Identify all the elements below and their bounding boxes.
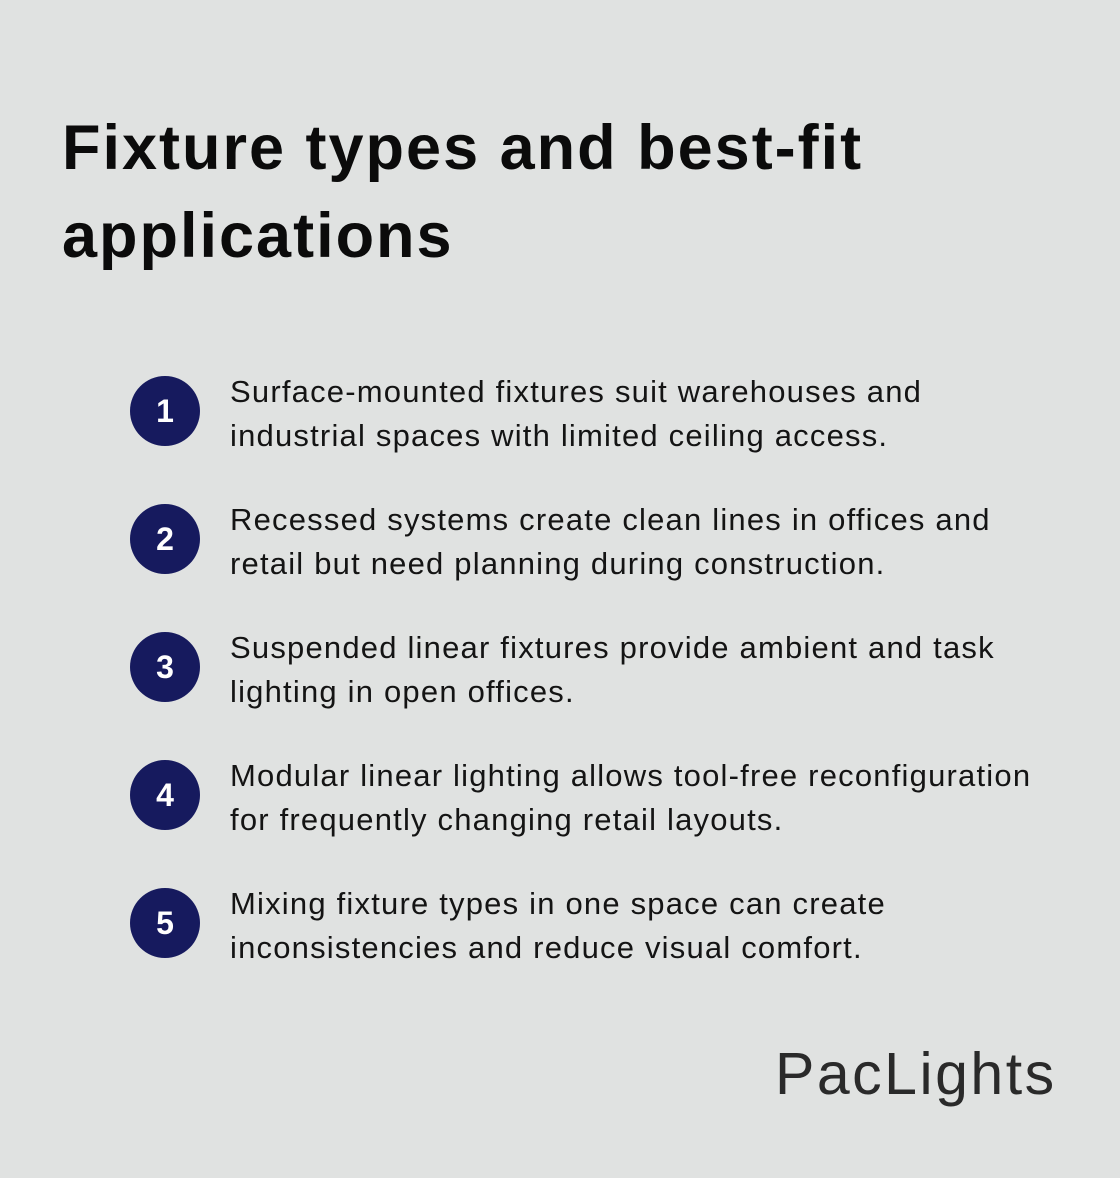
item 3	[130, 630, 995, 709]
item 1: Surface-mounted fixtures suit warehouses and	[230, 374, 922, 409]
item 2: 2	[156, 521, 174, 557]
item 2: retail but need planning during construction.	[230, 546, 885, 581]
item 5: inconsistencies and reduce visual comfort.	[230, 930, 863, 965]
item 2	[130, 502, 991, 581]
item 4: 4	[156, 777, 174, 813]
item 1: industrial spaces with limited ceiling access.	[230, 418, 888, 453]
item 5: Mixing fixture types in one space can create	[230, 886, 886, 921]
title: Fixture types and best-fit	[62, 113, 863, 183]
item 3: 3	[156, 649, 174, 685]
item 2: Recessed systems create clean lines in offices and	[230, 502, 991, 537]
title: applications	[62, 201, 454, 271]
item 5	[130, 886, 886, 965]
item 4: for frequently changing retail layouts.	[230, 802, 783, 837]
item 3: Suspended linear fixtures provide ambient and task	[230, 630, 995, 665]
item 4: Modular linear lighting allows tool-free reconfiguration	[230, 758, 1031, 793]
item 3: lighting in open offices.	[230, 674, 575, 709]
item 4	[130, 758, 1031, 837]
item 1	[130, 374, 922, 453]
logo: PacLights	[775, 1041, 1057, 1107]
item 1: 1	[156, 393, 174, 429]
item 5: 5	[156, 905, 174, 941]
title	[62, 113, 863, 271]
